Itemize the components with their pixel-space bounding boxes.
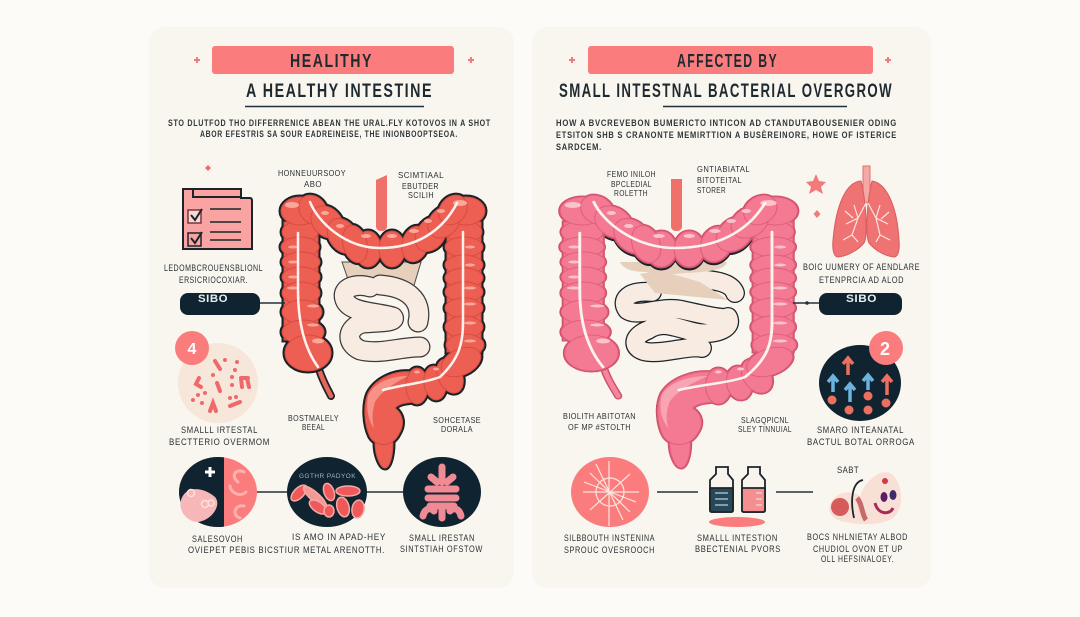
colon labels healthy: SCIMTIAAL <box>398 170 444 180</box>
icon: checklist <box>183 165 252 249</box>
SIBO pill affected: SIBO <box>846 293 877 305</box>
intro text: STO DLUTFOD THO DIFFERRENICE ABEAN THE URAL.FLY KOTOVOS IN A SHOT <box>168 118 491 128</box>
caption: bacteria badge: BECTTERIO OVERMOM <box>169 437 270 448</box>
caption: checklist: ERSICRIOCOXIAR. <box>179 275 248 285</box>
colon labels healthy: SCILIH <box>408 190 434 200</box>
colon labels healthy: ABO <box>304 179 322 189</box>
intro text: ABOR EFESTRIS SA SOUR EADREINEISE, THE INIONBOOPTSEOA. <box>200 129 458 139</box>
plus left <box>569 57 575 63</box>
SIBO pill healthy <box>180 293 285 315</box>
captions: bottom row healthy: SMALL IRESTAN <box>409 533 475 544</box>
colon labels healthy: BOSTMALELY <box>288 413 339 423</box>
intro text <box>168 118 491 139</box>
captions: bottom row healthy: OVIEPET PEBIS BICSTIUR METAL ARENOTTH. <box>188 545 385 556</box>
plus left <box>194 57 200 63</box>
intro text: ETSITON SHB S CRANONTE MEMIRTTION A BUSÈREINORE, HOWE OF ISTERICE <box>556 130 897 140</box>
captions: bottom row affected: BBECTENIAL PVORS <box>695 544 781 555</box>
appendix <box>318 366 331 396</box>
icon circle: split <box>179 457 257 527</box>
healthy header <box>168 46 491 139</box>
colon body <box>560 189 798 468</box>
small intestine affected <box>625 276 735 352</box>
connectors affected <box>657 491 813 493</box>
plus right <box>468 57 474 63</box>
colon labels affected: BPCLEDIAL <box>611 179 652 189</box>
icon circle: burst <box>571 457 649 527</box>
bacteria badge: 4 <box>188 341 197 358</box>
icon: lungs <box>833 166 899 257</box>
test tube healthy <box>376 175 387 231</box>
intro text: SARDCEM. <box>556 142 602 152</box>
icon: bottles <box>709 467 765 527</box>
caption: lungs: BOIC UUMERY OF AENDLARE <box>803 262 920 272</box>
arrows badge <box>819 331 903 421</box>
icon: star and sparkle <box>806 174 826 218</box>
appendix <box>603 366 618 396</box>
arrows badge: 2 <box>880 339 891 359</box>
banner: affected <box>588 46 873 74</box>
caption: lungs: ETENPRCIA AD ALOD <box>819 275 904 285</box>
underline <box>245 106 424 108</box>
captions: bottom row affected: OLL HEFSINALOEY. <box>821 554 894 565</box>
icon circle: villi <box>403 457 481 527</box>
captions: bottom row healthy: SALESOVOH <box>192 534 243 545</box>
bacteria badge <box>175 331 258 423</box>
underline <box>663 106 847 108</box>
colon labels affected: ROLETTH <box>614 188 648 198</box>
large intestine <box>560 189 798 468</box>
colon labels affected: BITOTEITAL <box>697 175 742 185</box>
heading: SMALL INTESTNAL BACTERIAL OVERGROW <box>559 81 893 102</box>
colon labels affected: SLAGQPICNL <box>741 415 789 425</box>
small intestine <box>344 285 420 352</box>
captions: bottom row affected: SILBBOUTH INSTENINA <box>564 533 655 544</box>
colon labels healthy <box>278 168 481 434</box>
captions: bottom row healthy: SINTSTIAH OFSTOW <box>400 544 483 555</box>
colon labels affected: BIOLITH ABITOTAN <box>563 411 636 421</box>
colon labels affected: SLEY TINNUIAL <box>738 424 792 434</box>
colon labels affected: FEMO INILOH <box>607 169 656 179</box>
captions: bottom row affected: SMALLL INTESTION <box>697 533 778 544</box>
caption: checklist <box>164 263 263 285</box>
captions: bottom row affected: SPROUC OVESROOCH <box>564 545 655 556</box>
caption: bacteria badge: SMALLL IRTESTAL <box>181 425 258 436</box>
illustration: healthy colon <box>281 189 486 468</box>
captions: bottom row healthy <box>188 532 483 556</box>
mesentery <box>620 262 728 300</box>
plus right <box>885 57 891 63</box>
caption: arrows badge <box>807 425 915 448</box>
banner: healthy <box>212 46 454 74</box>
caption: checklist: LEDOMBCROUENSBLIONL <box>164 263 263 273</box>
icon: tissue sample: SABT <box>837 465 859 476</box>
intro text: HOW A BVCREVEBON BUMERICTO INTICON AD CTANDUTABOUSENIER ODING <box>556 118 897 128</box>
colon labels affected: GNTIABIATAL <box>697 164 750 174</box>
caption: arrows badge: SMARO INTEANATAL <box>817 425 904 436</box>
SIBO pill healthy: SIBO <box>198 293 228 305</box>
illustration: affected colon <box>560 189 798 468</box>
icon: tissue sample <box>829 465 901 524</box>
caption: bacteria badge <box>169 425 270 448</box>
captions: bottom row affected: BOCS NHLNIETAY ALBOD <box>807 532 908 543</box>
captions: bottom row healthy: IS AMO IN APAD-HEY <box>292 532 386 543</box>
colon labels healthy: HONNEUURSOOY <box>278 168 346 178</box>
captions: bottom row affected <box>564 532 908 565</box>
caption: lungs <box>803 262 920 285</box>
icon circle: bacteria rods <box>287 457 367 527</box>
colon labels affected: STORER <box>697 185 726 195</box>
connector healthy <box>256 491 405 493</box>
mesentery <box>342 262 421 292</box>
heading: A HEALTHY INTESTINE <box>246 81 433 102</box>
colon labels healthy: EBUTDER <box>402 181 439 191</box>
intro text <box>556 118 897 152</box>
banner label: HEALITHY <box>290 51 373 71</box>
icon circle: bacteria rods: GGTHR PADYOK <box>299 473 356 480</box>
affected header <box>556 46 897 152</box>
banner label: AFFECTED BY <box>677 51 778 71</box>
panel: healthy <box>149 27 514 588</box>
panel: affected by SIBO <box>532 27 931 588</box>
colon labels affected <box>563 164 792 434</box>
captions: bottom row affected: CHUDIOL OVON ET UP <box>813 544 903 555</box>
colon labels healthy: DORALA <box>441 424 473 434</box>
colon labels healthy: SOHCETASE <box>433 415 481 425</box>
colon labels healthy: BEEAL <box>302 422 325 432</box>
colon labels affected: OF MP #STOLTH <box>568 422 631 432</box>
SIBO pill affected <box>793 293 902 315</box>
caption: arrows badge: BACTUL BOTAL ORROGA <box>807 437 915 448</box>
test tube affected <box>671 179 682 231</box>
large intestine <box>281 189 486 468</box>
